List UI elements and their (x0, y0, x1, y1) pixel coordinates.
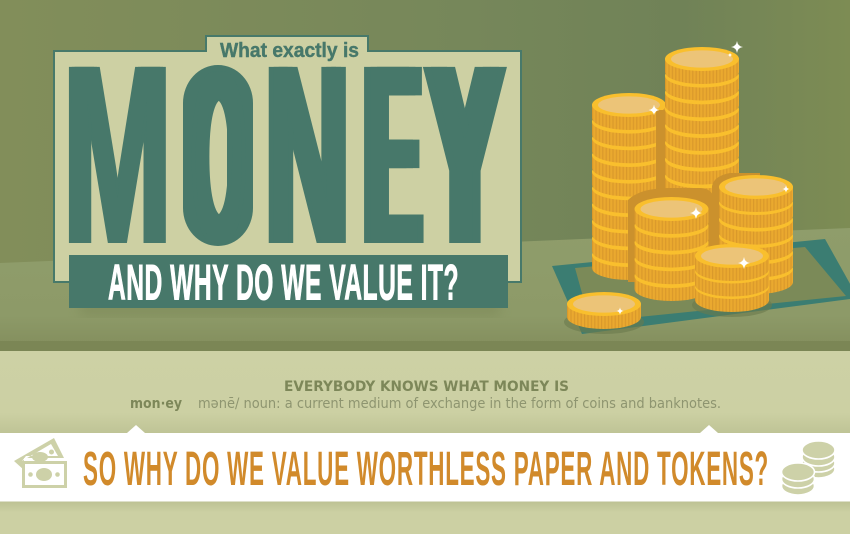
banknote under the coins (552, 239, 850, 334)
front middle stack (634, 197, 708, 301)
banknote inner (575, 247, 846, 322)
cast shadow right stack (712, 173, 760, 290)
background wall (0, 0, 850, 345)
lower section background (0, 351, 850, 433)
coin cast shadows (628, 188, 715, 282)
headword: mon·ey (130, 396, 182, 412)
icon: coins (782, 441, 835, 495)
sparkles (616, 41, 790, 315)
right stack (719, 175, 793, 294)
title word: MONEY: N (266, 12, 349, 298)
front small stack shadow (692, 293, 772, 317)
floor (0, 228, 850, 345)
title panel (54, 36, 521, 282)
shadow on left stack (656, 110, 666, 210)
subtitle banner (69, 254, 508, 310)
title word: MONEY: E (365, 12, 420, 298)
pointer right (700, 425, 718, 433)
subtitle banner: AND WHY DO WE VALUE IT? (108, 254, 459, 310)
definition text: mənē/ noun: a current medium of exchange in the form of coins and banknotes. (198, 396, 721, 412)
back tall stack (665, 47, 739, 235)
single coin shadow (564, 310, 644, 334)
pointer left (127, 425, 145, 433)
single coin (567, 292, 641, 329)
title word: MONEY: Y (429, 12, 500, 298)
lower strip (0, 501, 850, 534)
kicker: What exactly is: What exactly is (220, 40, 359, 62)
title shadow (80, 300, 500, 316)
front small stack (695, 244, 769, 312)
title word: MONEY: O (193, 22, 244, 294)
dark divider band (0, 341, 850, 351)
title word: MONEY: M (63, 12, 172, 298)
back left stack (592, 93, 666, 280)
icon: banknotes (14, 438, 67, 488)
definition heading: EVERYBODY KNOWS WHAT MONEY IS (284, 379, 569, 395)
white question band (0, 425, 850, 502)
coin stacks (564, 47, 793, 334)
title word: MONEY (63, 12, 507, 298)
